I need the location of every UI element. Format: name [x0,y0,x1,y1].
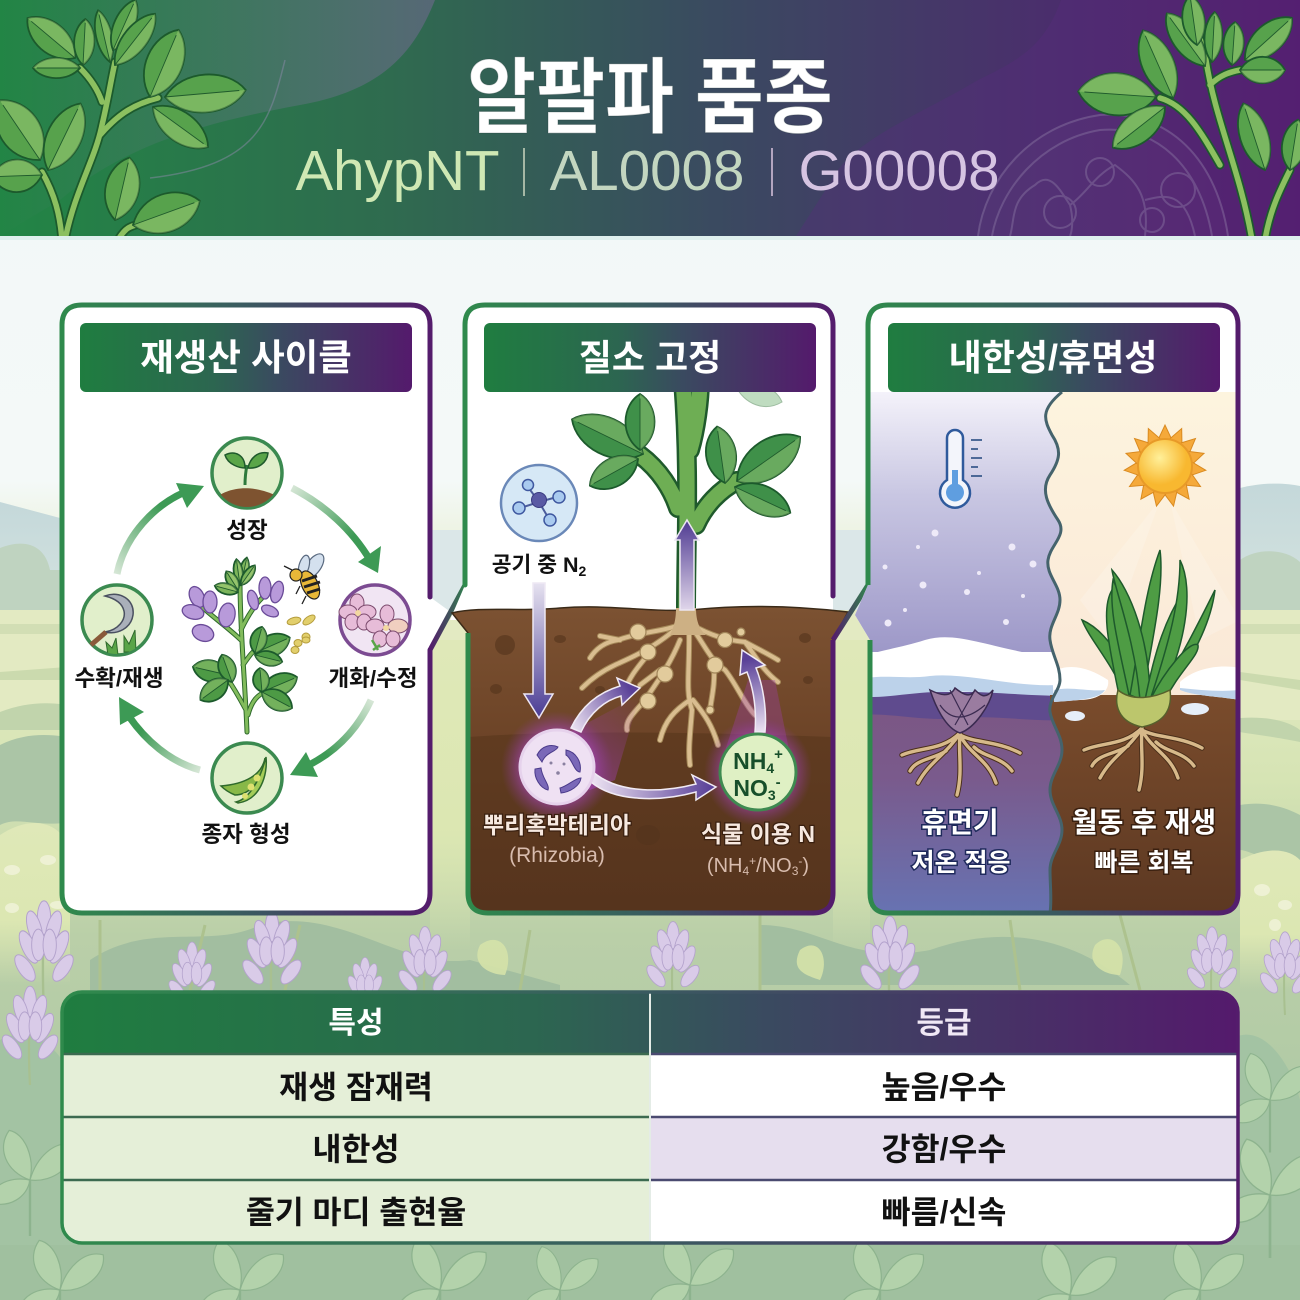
warm ground [1050,667,1240,915]
label: dormancy: 휴면기 [921,807,999,838]
label: plant available N: + [749,854,756,868]
arrow: up to plant [675,520,699,610]
table header row: 특성 [328,1007,384,1040]
label: plant available N: (NH [707,855,742,877]
row: cold tolerance: 내한성 [313,1131,399,1167]
label: plant available N: 3 [792,864,799,878]
row: regrowth potential: 높음/우수 [882,1069,1006,1105]
label: rhizobia: 뿌리혹박테리아 [483,812,631,838]
right header plant [1077,0,1300,240]
glow wedges [501,680,812,826]
label: seed formation: 종자 형성 [201,822,291,847]
icon: sickle harvest [82,585,152,655]
label: rhizobia: (Rhizobia) [509,844,605,867]
row: cold tolerance [313,1131,1006,1167]
title: 알팔파 품종 [467,52,833,144]
icon: seeds [286,613,317,654]
row: stem node emergence: 줄기 마디 출현율 [246,1194,466,1230]
label: harvest regrowth: 수확/재생 [74,666,164,691]
panel: reproduction cycle [62,305,465,913]
icon: seed pod [212,743,282,813]
subtitle codes: AL0008 [550,139,744,202]
icon: growth sprout [212,438,282,510]
cold ground [872,637,1060,910]
left header plant [0,0,247,243]
arrow: N2 down [524,583,553,718]
label: rhizobia [483,812,631,867]
icon: NH4 NO3: - [776,774,781,791]
trait table [62,992,1238,1243]
cell motif [978,115,1228,236]
row: stem node emergence [246,1194,1006,1230]
label: plant available N [701,821,815,878]
row: regrowth potential [279,1069,1006,1105]
warm side background [1047,392,1236,695]
panel: nitrogen fixation [450,305,868,913]
row: stem node emergence: 빠름/신속 [882,1194,1006,1230]
heading: nitrogen fixation [484,323,816,392]
dormant crown and roots [902,688,1020,795]
label: plant available N: 4 [742,864,749,878]
icon: rhizobia [520,730,594,804]
center alfalfa plant [181,557,301,732]
label: dormancy [912,807,1010,877]
regrowth plant and roots [1082,550,1215,790]
soil [452,585,868,913]
snowflakes [882,530,1036,626]
label: growth: 성장 [226,518,268,543]
subtitle codes: G00008 [798,139,1000,202]
panel: cold tolerance dormancy [850,300,1250,920]
icon: bee [284,551,328,604]
icon: flowers pollination [339,585,410,655]
table header row: 등급 [916,1007,972,1040]
label: dormancy: 저온 적응 [912,849,1010,877]
arrows: nitrogen flow [571,650,766,800]
header banner [0,0,1300,243]
plant shoot [564,380,811,612]
heading: reproduction cycle: 재생산 사이클 [140,337,352,378]
label: atmospheric N2: 2 [579,563,587,579]
label: plant available N: - [798,854,802,868]
label: atmospheric N2: 공기 중 N [492,553,579,577]
row: regrowth potential: 재생 잠재력 [279,1069,433,1105]
icon: NH4 NO3: 3 [768,787,776,803]
row: cold tolerance: 강함/우수 [882,1131,1006,1167]
label: post-winter regrowth: 월동 후 재생 [1072,807,1216,838]
roots with nodules [582,608,778,765]
table header row [62,992,1238,1054]
subtitle codes: AhypNT [295,139,500,202]
subtitle codes [296,148,998,202]
label: post-winter regrowth [1072,807,1216,877]
label: plant available N: /NO [756,855,792,877]
heading: reproduction cycle [80,323,412,392]
icon: NH4 NO3 [720,734,796,810]
label: post-winter regrowth: 빠른 회복 [1095,849,1193,877]
label: flowering pollination: 개화/수정 [328,666,418,691]
cycle arrows [117,483,381,777]
icon: sun [1123,425,1207,508]
label: plant available N: 식물 이용 N [701,821,815,847]
heading: cold tolerance [888,323,1220,392]
heading: nitrogen fixation: 질소 고정 [579,337,721,378]
icon: NH4 NO3: NH [733,748,766,774]
icon: thermometer [940,430,982,508]
icon: NH4 NO3: + [774,746,783,763]
icon: NH4 NO3: 4 [766,760,774,776]
heading: cold tolerance: 내한성/휴면성 [949,337,1157,378]
icon: N2 molecule [501,465,577,541]
icon: NH4 NO3: NO [733,775,768,801]
label: plant available N: ) [802,855,809,877]
